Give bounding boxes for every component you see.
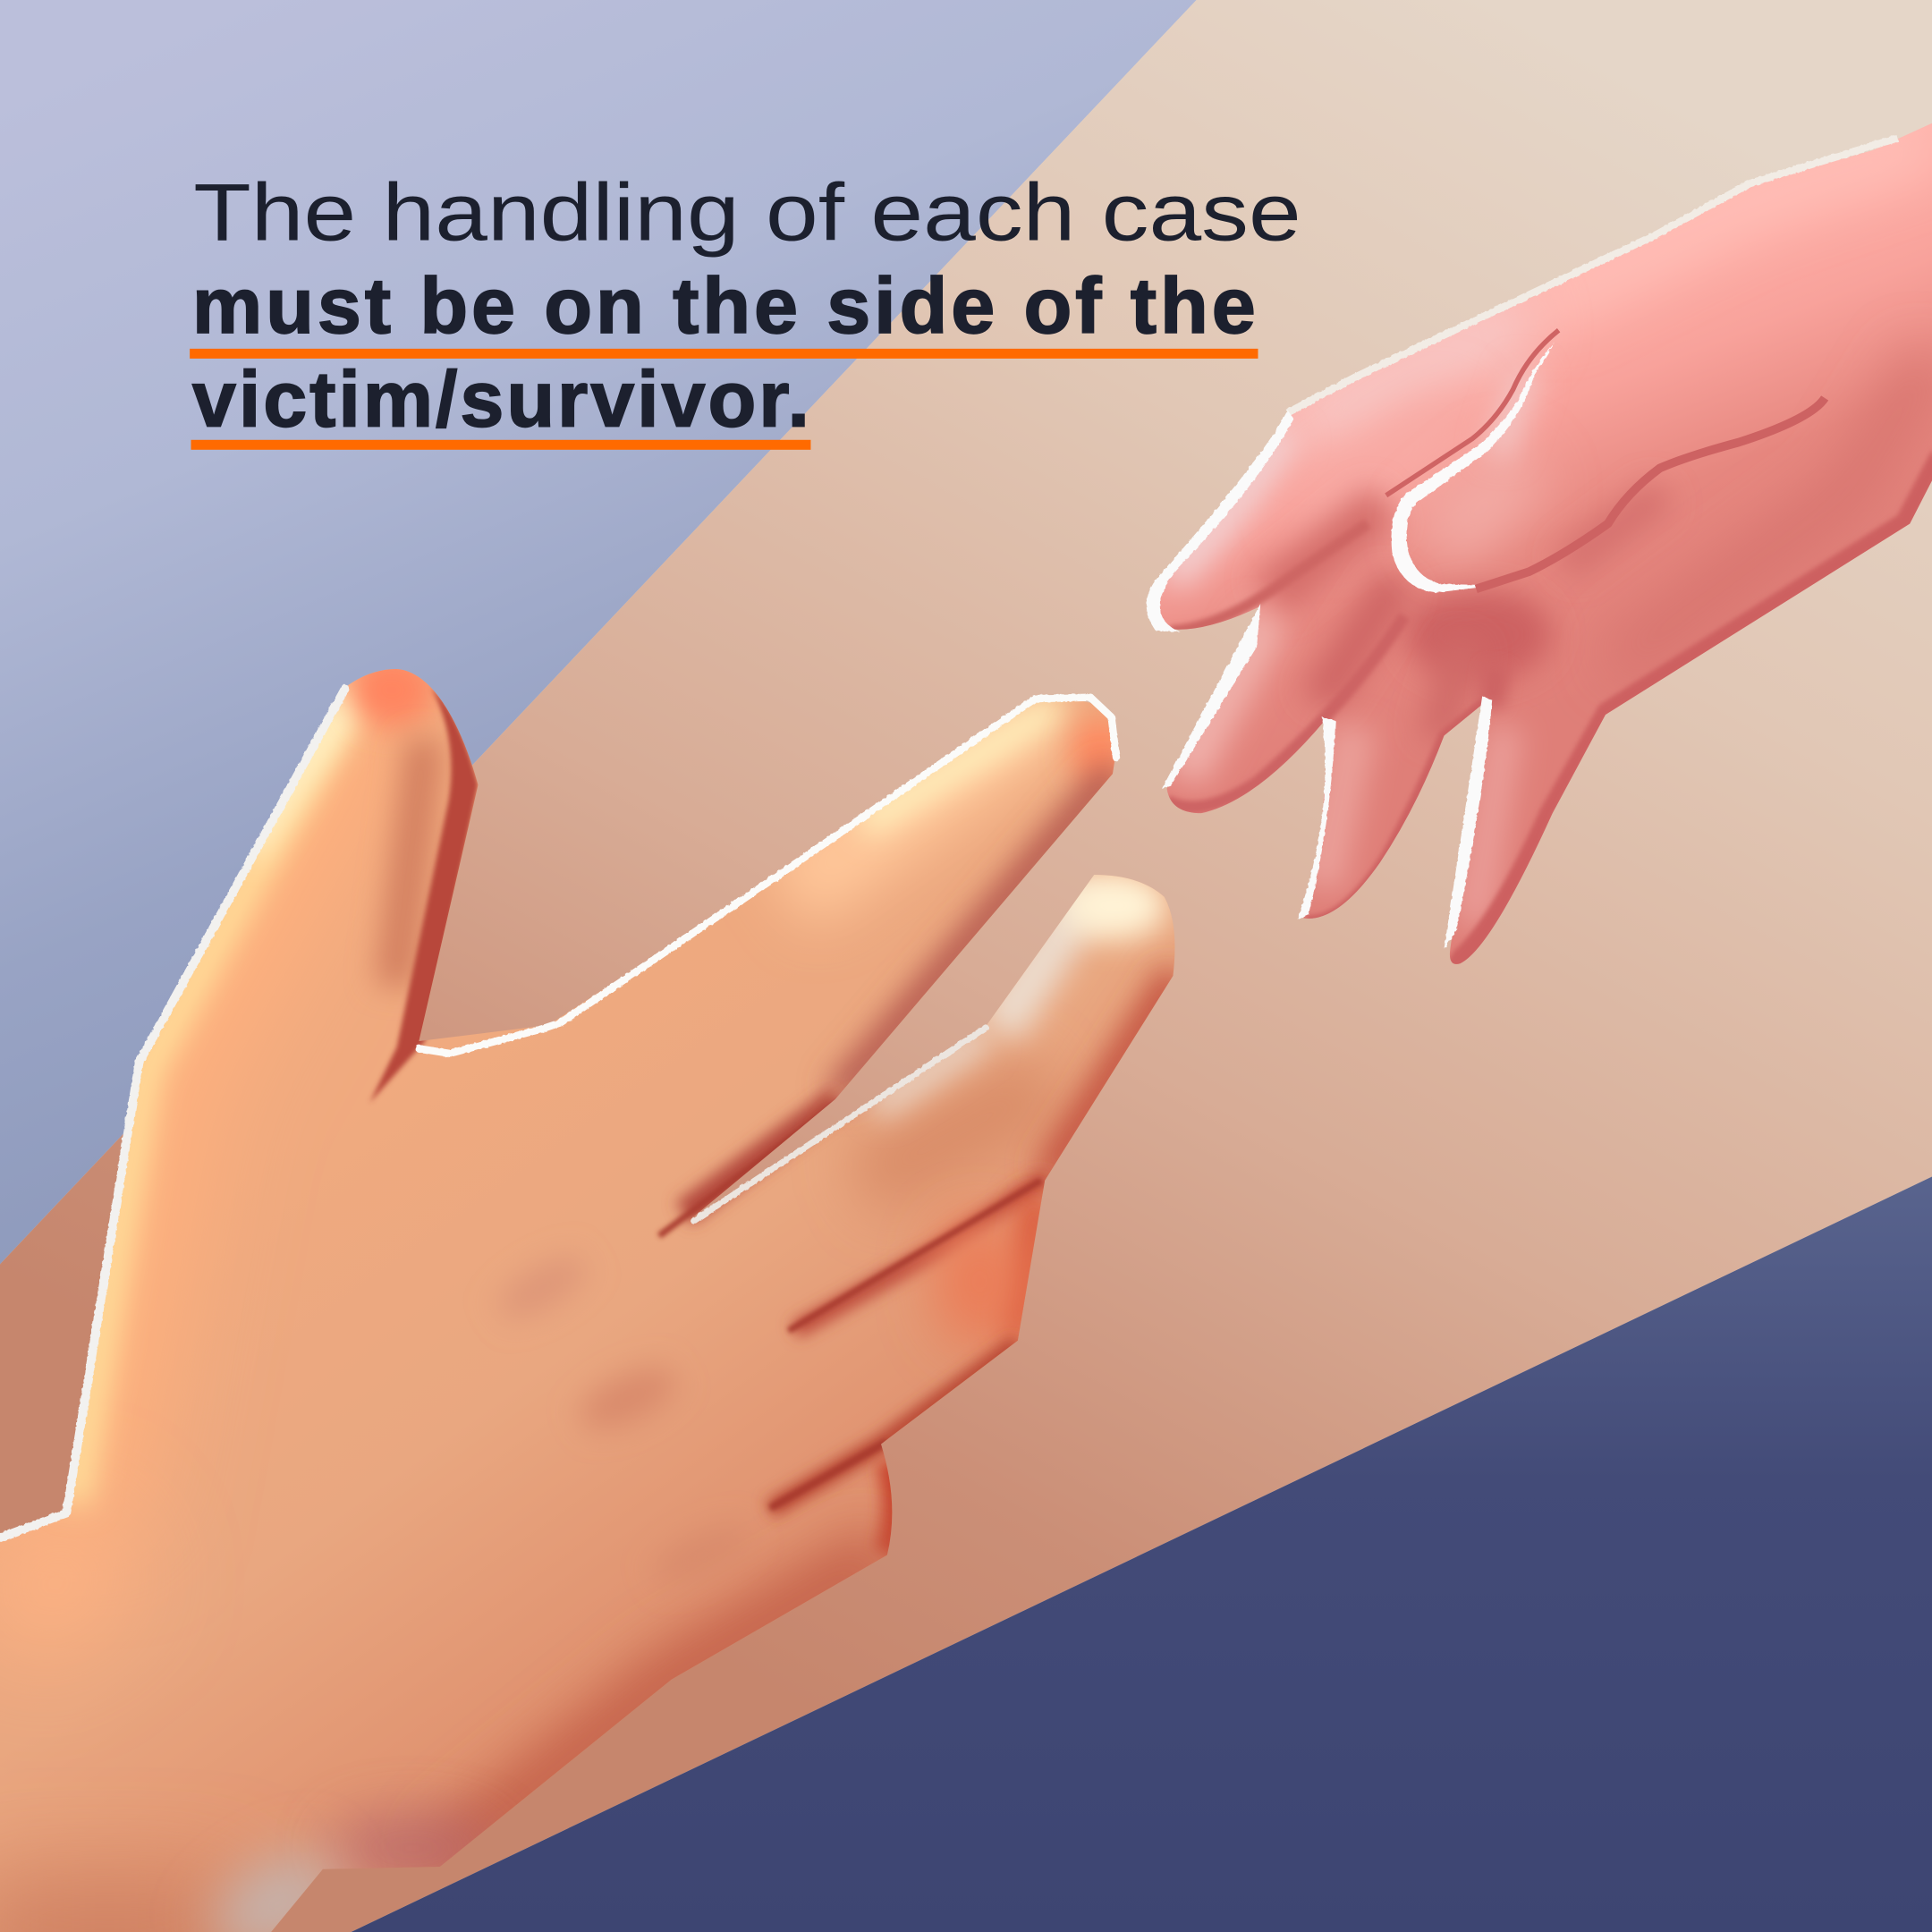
headline line 1: The handling of each case — [193, 168, 1301, 258]
finger 3 highlights — [862, 1084, 1047, 1182]
illustration: left hand reaching up — [0, 616, 1233, 1932]
headline text — [190, 168, 1301, 450]
background: blue wedge — [0, 0, 1197, 1264]
finger 1 tip and side — [350, 653, 434, 727]
thumb shading — [1436, 468, 1528, 548]
thumb crease white line — [1392, 343, 1555, 593]
lower edge bands — [1614, 357, 1932, 665]
headline line 2 bold: must be on the side of the — [192, 261, 1256, 350]
headline line 3 bold: victim/survivor. — [192, 355, 809, 444]
finger 4 and wrist shading — [1015, 1195, 1038, 1337]
finger 2 highlights — [789, 708, 1047, 894]
right hand white rim — [1147, 138, 1897, 949]
finger highlights — [1182, 616, 1269, 776]
left hand shaded shape — [0, 616, 1233, 1932]
thumb crease dark line — [1386, 330, 1559, 496]
background: navy corner — [352, 1177, 1932, 1932]
hand wrinkle line — [1476, 398, 1825, 589]
left hand white rim — [0, 689, 1116, 1538]
illustration: right hand reaching down — [1109, 98, 1932, 986]
underline 1 — [190, 349, 1258, 359]
right hand shaded shape — [1159, 123, 1932, 964]
creases — [659, 1103, 838, 1236]
web between fingers — [1269, 505, 1386, 597]
knuckle marks — [581, 1365, 674, 1431]
underline 2 — [191, 440, 810, 450]
